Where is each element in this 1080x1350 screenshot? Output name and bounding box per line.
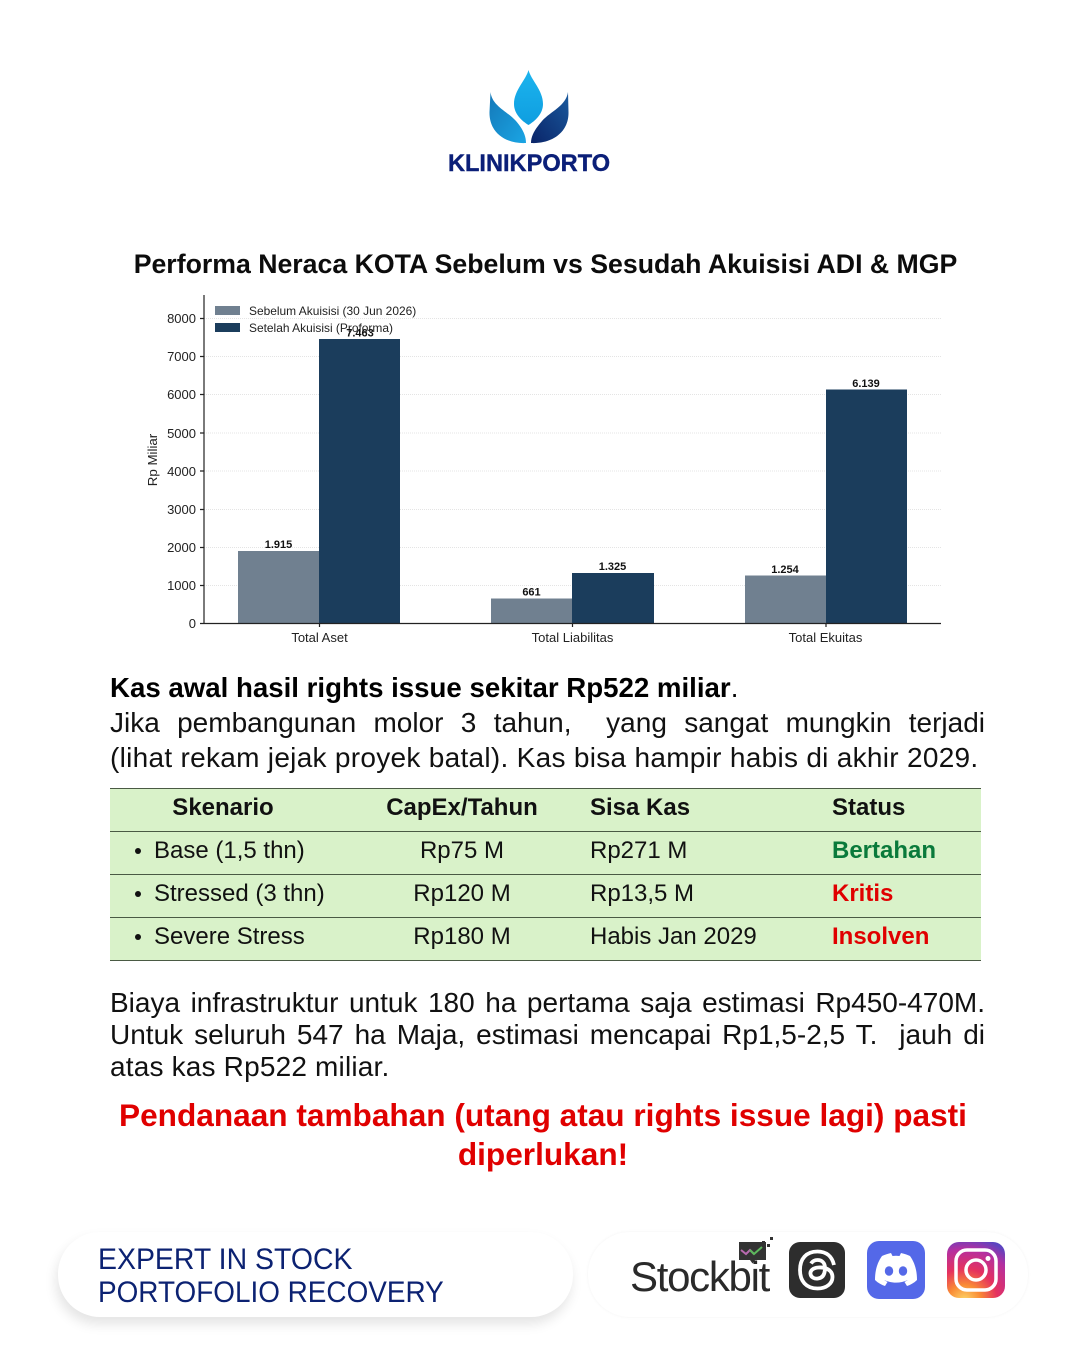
row: Base: Rp75 M (420, 837, 504, 864)
row: Severe Stress: Rp180 M (413, 923, 511, 950)
red callout: Pendanaan tambahan (utang atau rights issue lagi) pasti (119, 1097, 967, 1133)
tagline pill: PORTOFOLIO RECOVERY (98, 1276, 444, 1309)
y axis labels: 6000 (167, 387, 196, 402)
row: Severe Stress: Severe Stress (154, 923, 305, 950)
intro text block: Kas awal hasil rights issue sekitar Rp522 miliar. (110, 672, 738, 703)
bar value labels: 7.463 (346, 328, 374, 340)
y axis labels: 4000 (167, 464, 196, 479)
bar value labels: 1.915 (265, 539, 292, 551)
bars: Total Liabilitas (491, 573, 654, 623)
bar value labels: 6.139 (852, 378, 880, 390)
y axis labels: 3000 (167, 502, 196, 517)
tagline pill: EXPERT IN STOCK (98, 1243, 352, 1276)
social pill (588, 1232, 1028, 1317)
table header: CapEx/Tahun (386, 794, 538, 821)
table header (172, 794, 905, 821)
logo: Klinikporto (448, 70, 610, 177)
table header: Sisa Kas (590, 794, 690, 821)
legend (215, 304, 416, 335)
bar value labels: 661 (522, 586, 541, 598)
row: Severe Stress: Habis Jan 2029 (590, 923, 757, 950)
row: Stressed (135, 880, 893, 907)
row: Stressed: Stressed (3 thn) (154, 880, 325, 907)
row: Base (135, 837, 936, 864)
legend: Setelah Akuisisi (Proforma) (249, 321, 393, 335)
row: Severe Stress (135, 923, 929, 950)
bar value labels: 1.254 (771, 564, 800, 576)
row: Stressed: Kritis (832, 880, 893, 907)
y axis labels: 0 (189, 616, 196, 631)
y axis labels: 1000 (167, 578, 196, 593)
x axis labels: Total Liabilitas (532, 630, 614, 645)
chart title: Performa Neraca KOTA Sebelum vs Sesudah Akuisisi ADI & MGP (134, 249, 957, 279)
x axis labels (291, 630, 863, 645)
x axis labels: Total Ekuitas (789, 630, 863, 645)
bar value labels: 1.325 (599, 561, 626, 573)
y axis title: Rp Miliar (145, 433, 160, 486)
icon: Stockbit logo: Stockbit (630, 1252, 769, 1300)
bars: Total Ekuitas (745, 390, 907, 623)
y axis labels: 7000 (167, 349, 196, 364)
row: Base: Rp271 M (590, 837, 687, 864)
logo: Klinikporto: KLINIKPORTO (448, 151, 610, 177)
intro text block: Jika pembangunan molor 3 tahun, yang sangat mungkin terjadi (110, 707, 985, 738)
scenario table (110, 788, 981, 961)
y axis labels: 8000 (167, 311, 196, 326)
bar chart (145, 295, 941, 645)
table header: Status (832, 794, 905, 821)
intro text block: (lihat rekam jejak proyek batal). Kas bisa hampir habis di akhir 2029. (110, 742, 978, 773)
row: Stressed: Rp13,5 M (590, 880, 694, 907)
infrastructure text block: atas kas Rp522 miliar. (110, 1051, 389, 1082)
red callout: diperlukan! (458, 1136, 628, 1172)
row: Base: Bertahan (832, 837, 936, 864)
tagline pill (58, 1232, 573, 1317)
infrastructure text block: Biaya infrastruktur untuk 180 ha pertama saja estimasi Rp450-470M. (110, 987, 985, 1018)
row: Base: Base (1,5 thn) (154, 837, 305, 864)
red callout (119, 1097, 967, 1172)
legend: Sebelum Akuisisi (30 Jun 2026) (249, 304, 416, 318)
icon: Threads (789, 1242, 845, 1298)
x axis labels: Total Aset (291, 630, 348, 645)
intro text block (110, 672, 985, 773)
icon: Discord (867, 1241, 925, 1299)
infrastructure text block (110, 987, 985, 1082)
y axis labels: 2000 (167, 540, 196, 555)
y axis labels: 5000 (167, 426, 196, 441)
y axis labels (167, 311, 196, 631)
row: Severe Stress: Insolven (832, 923, 929, 950)
row: Stressed: Rp120 M (413, 880, 511, 907)
axes (200, 295, 941, 627)
infrastructure text block: Untuk seluruh 547 ha Maja, estimasi mencapai Rp1,5-2,5 T. jauh di (110, 1019, 985, 1050)
icon: Instagram (947, 1242, 1005, 1298)
bars: Total Aset (238, 339, 400, 623)
bar value labels (265, 328, 880, 598)
table header: Skenario (172, 794, 274, 821)
